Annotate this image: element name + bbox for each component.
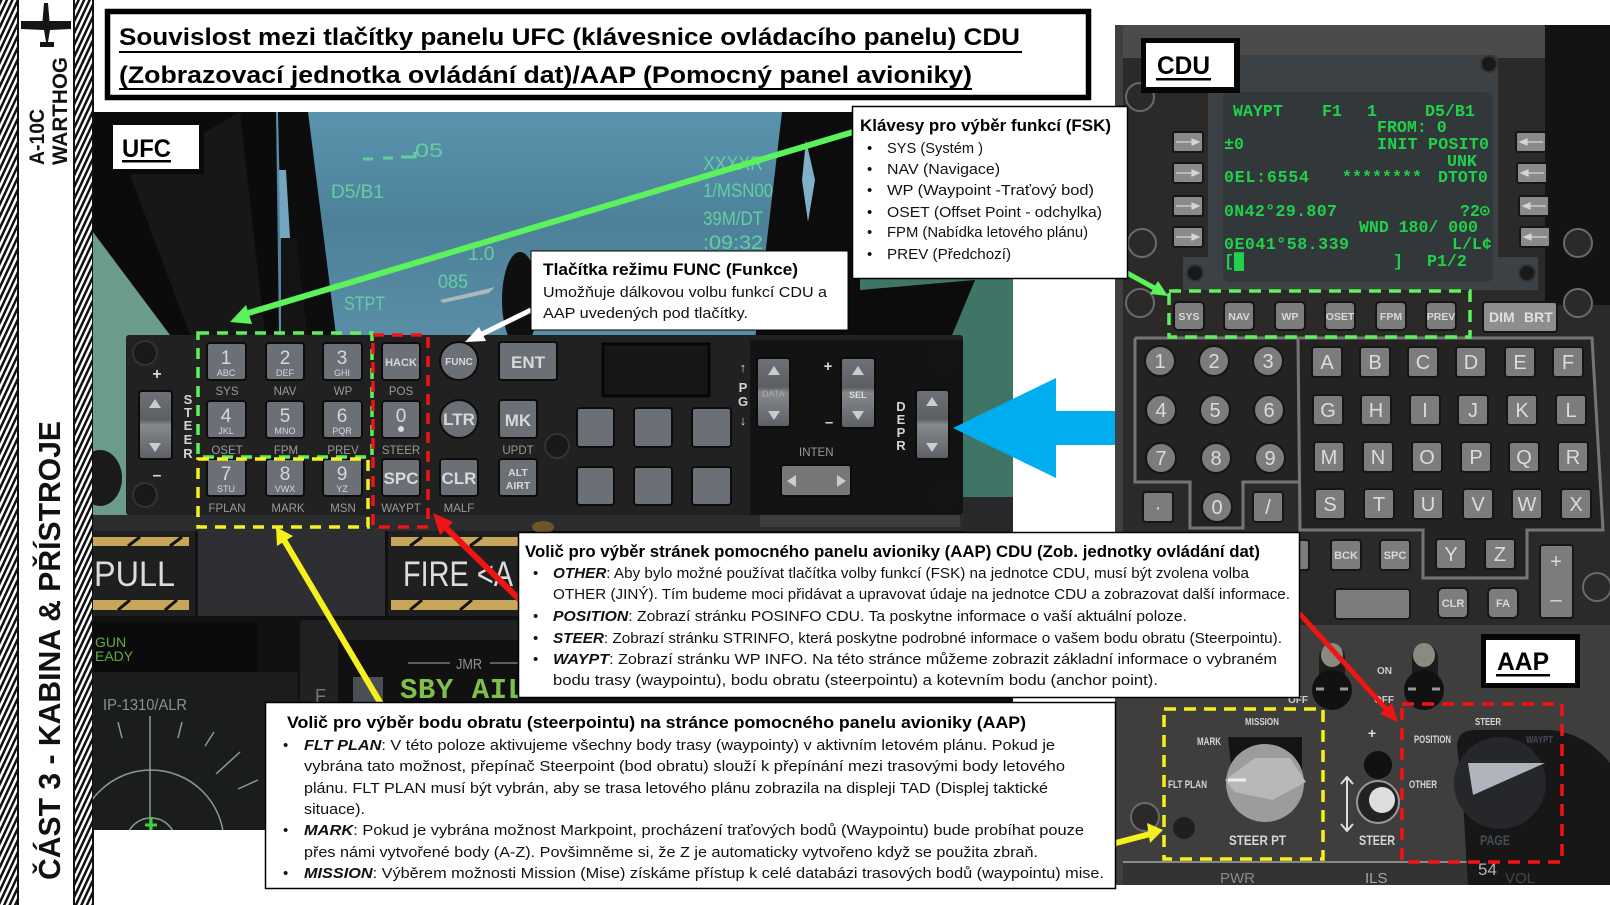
CDU number keys: 7: [1155, 448, 1167, 470]
label: CDU: [1141, 38, 1240, 93]
CDU letter keys: G: [1320, 400, 1336, 422]
CDU letter keys: J: [1468, 400, 1478, 422]
HUD symbology: [331, 141, 773, 315]
PG label and DATA, SEL, DEPR, INTEN rockers: R: [896, 438, 906, 453]
sidebar label: aircraft name: WARTHOG: [49, 57, 72, 165]
AAP bottom labels: PWR: [1220, 870, 1255, 887]
STEER rocker: R: [183, 446, 193, 461]
callout: function select keys FSK: •: [867, 204, 872, 221]
PG label and DATA, SEL, DEPR, INTEN rockers: P: [739, 380, 748, 395]
page keys HACK 0 SPC: WAYPT: [381, 503, 421, 515]
CDU letter keys: O: [1419, 447, 1435, 469]
CDU letter keys: L: [1565, 400, 1577, 422]
CDU screen text: ±0: [1224, 135, 1244, 154]
CDU FSK keys: BRT: [1524, 309, 1553, 325]
callout: function select keys FSK: PREV (Předchozí): [887, 246, 1011, 263]
callout: AAP page selector: POSITION: Zobrazí stránku POSINFO CDU. Ta poskytne informace o vaší aktuální poloze.: [553, 608, 1187, 625]
toggle switches: ON: [1377, 666, 1392, 677]
callout: AAP page selector: OTHER: Aby bylo možné používat tlačítka volby funkcí (FSK) na jednotce CDU, musí být zvolena volba: [553, 565, 1250, 582]
AAP panel plate: [1123, 625, 1610, 862]
callout: steerpoint selector: situace).: [304, 801, 365, 818]
HUD symbology: 1/MSN00: [703, 181, 773, 202]
callout: steerpoint selector: plánu. FLT PLAN musí být vybrán, aby se trasa letového plánu zobrazila na displeji TAD (Displej taktické: [304, 780, 1048, 797]
CDU screen text: P1/2: [1427, 252, 1467, 271]
CDU letter keys: P: [1469, 447, 1483, 469]
CDU screen text: [1224, 102, 1492, 271]
callout: function select keys FSK: •: [867, 140, 872, 157]
CDU screen text: 0E041°58.339: [1224, 235, 1349, 254]
photo: UFC cockpit scene: [93, 112, 1013, 830]
number keys with FSK labels: FPM: [274, 445, 298, 457]
number keys with FSK labels: 1: [221, 348, 231, 369]
number keys with FSK labels: PQR: [332, 426, 352, 436]
CDU letter keys: BCK: [1334, 550, 1358, 562]
JMR panel: F: [315, 686, 326, 706]
callout: steerpoint selector: [266, 702, 1116, 888]
number keys with FSK labels: 6: [337, 406, 347, 427]
UFC green FSK dashed frame: [198, 333, 372, 457]
CDU letter keys: [1289, 347, 1591, 619]
CDU number keys: ·: [1155, 497, 1161, 519]
page number: 54: [1478, 860, 1497, 879]
STEER rocker: E: [184, 418, 193, 433]
STEER rocker: T: [184, 405, 192, 420]
CDU screen text: L/L¢: [1452, 235, 1492, 254]
arrow: white FUNC: [465, 310, 531, 342]
knob: PAGE selector: POSITION: [1414, 734, 1451, 746]
UFC scratchpad display: [603, 344, 709, 396]
sidebar: hatched strips and chapter label: [0, 0, 94, 905]
callout: function select keys FSK: •: [867, 224, 872, 241]
callout: steerpoint selector: •: [283, 822, 288, 839]
PG label and DATA, SEL, DEPR, INTEN rockers: G: [738, 394, 748, 409]
number keys with FSK labels: FPLAN: [208, 503, 246, 515]
label: UFC: UFC: [122, 135, 171, 163]
photo: CDU and AAP panels: [1115, 25, 1610, 887]
callout: function select keys FSK: •: [867, 246, 872, 263]
callout: AAP page selector: •: [533, 630, 538, 647]
callout: steerpoint selector: •: [283, 865, 288, 882]
callout: AAP page selector: STEER: Zobrazí stránku STRINFO, která poskytne podrobné informace o vašem bodu obratu (Steerpointu).: [553, 630, 1282, 647]
JMR panel: [300, 620, 528, 707]
STEER toggle: +: [1368, 725, 1376, 741]
CDU letter keys: Q: [1516, 447, 1532, 469]
callout: function select keys FSK: FPM (Nabídka letového plánu): [887, 224, 1088, 241]
CDU screen text: ]: [1393, 252, 1403, 271]
AAP bottom labels: [1221, 873, 1534, 883]
PG label and DATA, SEL, DEPR, INTEN rockers: –: [825, 414, 833, 431]
number keys with FSK labels: 7: [221, 464, 231, 485]
CDU number keys: 0: [1211, 497, 1223, 519]
CDU screen text: UNK: [1447, 152, 1477, 171]
callout: function select keys FSK: •: [867, 161, 872, 178]
CDU screen text: F1: [1322, 102, 1342, 121]
number keys with FSK labels: MARK: [271, 503, 305, 515]
CDU letter keys: E: [1513, 352, 1527, 374]
CDU letter keys: M: [1321, 447, 1337, 469]
HUD symbology: STPT: [344, 294, 385, 315]
callout: AAP page selector: bodu trasy (waypointu), bodu obratu (steerpointu) a kotevním bodu (anchor point).: [553, 672, 1158, 689]
PG label and DATA, SEL, DEPR, INTEN rockers: SEL: [849, 390, 867, 400]
CDU number keys: 2: [1208, 351, 1220, 373]
CDU FSK keys: [1174, 302, 1557, 332]
FUNC LTR CLR ENT MK ALT keys: MALF: [444, 503, 474, 515]
CDU letter keys: I: [1422, 400, 1428, 422]
CDU letter keys: B: [1368, 352, 1382, 374]
toggle switches: OFF: [1374, 695, 1394, 706]
CDU screen text: [█: [1224, 252, 1244, 271]
callout: function select keys FSK: Klávesy pro výběr funkcí (FSK): [860, 117, 1111, 135]
CDU number keys: 4: [1155, 400, 1167, 422]
number keys with FSK labels: 5: [280, 406, 290, 427]
callout: steerpoint selector: •: [283, 737, 288, 754]
number keys with FSK labels: JKL: [218, 426, 234, 436]
toggle switches: [1288, 643, 1444, 710]
indicator: GUN READY: [96, 638, 133, 661]
number keys with FSK labels: 3: [337, 348, 347, 369]
CDU letter keys: H: [1369, 400, 1383, 422]
callout: steerpoint selector: MARK : Pokud je vybrána možnost Markpoint, procházení traťových bodů (Waypointu) bude probíhat pouze: [304, 822, 1084, 839]
radar warning display IP-1310/ALR: [93, 684, 298, 830]
PG label and DATA, SEL, DEPR, INTEN rockers: D: [896, 399, 906, 414]
sidebar label: chapter title: ČÁST 3 - KABINA & PŘÍSTROJE: [31, 421, 67, 880]
label: UFC: [108, 120, 204, 174]
HUD symbology: 05: [415, 141, 443, 162]
callout: AAP page selector: OTHER (JINÝ). Tím budeme moci přidávat a upravovat údaje na jednotce CDU a zobrazovat další informace.: [553, 586, 1290, 603]
CDU screen text: INIT POSIT0: [1377, 135, 1489, 154]
knob: PAGE selector: [1409, 716, 1553, 848]
number keys with FSK labels: SYS: [215, 386, 239, 398]
callout: steerpoint selector: Volič pro výběr bodu obratu (steerpointu) na stránce pomocného panelu avioniky (AAP): [287, 714, 1026, 732]
CDU screen text: WAYPT: [1233, 102, 1283, 121]
PG label and DATA, SEL, DEPR, INTEN rockers: [738, 358, 949, 496]
callout: AAP page selector: •: [533, 608, 538, 625]
STEER rocker: [139, 366, 193, 484]
CDU number keys: 1: [1154, 351, 1166, 373]
number keys with FSK labels: DEF: [276, 368, 295, 378]
knob: PAGE selector: OTHER: [1409, 779, 1437, 791]
AAP bottom labels: VOL: [1505, 870, 1535, 887]
CDU screen text: DTOT0: [1438, 168, 1488, 187]
callout: FUNC mode buttons: Tlačítka režimu FUNC (Funkce): [543, 261, 798, 279]
knob: PAGE selector: STEER: [1475, 716, 1501, 728]
number keys with FSK labels: [207, 343, 362, 515]
CDU letter keys: D: [1464, 352, 1478, 374]
CDU letter keys: Z: [1494, 544, 1506, 566]
FUNC LTR CLR ENT MK ALT keys: CLR: [442, 469, 476, 488]
CDU FSK keys: DIM: [1489, 309, 1515, 325]
CDU screen text: ?2⊙: [1460, 202, 1490, 221]
HUD symbology: 085: [438, 272, 468, 293]
HUD symbology: 1.0: [468, 244, 494, 265]
knob: PAGE selector: WAYPT: [1526, 734, 1553, 746]
UFC red dashed frame: [373, 335, 428, 527]
CDU FSK keys: FPM: [1380, 311, 1402, 323]
STEER toggle: STEER: [1359, 832, 1395, 848]
FUNC LTR CLR ENT MK ALT keys: ENT: [511, 353, 546, 372]
number keys with FSK labels: ABC: [217, 368, 236, 378]
HUD symbology: :09:32: [703, 233, 763, 254]
CDU letter keys: K: [1515, 400, 1529, 422]
number keys with FSK labels: 2: [280, 348, 290, 369]
number keys with FSK labels: WP: [334, 386, 353, 398]
CDU FSK keys: PREV: [1427, 311, 1455, 323]
JMR panel: SBY AIL: [400, 674, 525, 707]
screws on AAP: [1131, 803, 1195, 839]
arrow: green FSK to UFC: [230, 132, 853, 324]
number keys with FSK labels: YZ: [336, 484, 348, 494]
page keys HACK 0 SPC: STEER: [382, 445, 420, 457]
CDU letter keys: S: [1323, 494, 1337, 516]
CDU FSK keys: SYS: [1178, 311, 1200, 323]
PG label and DATA, SEL, DEPR, INTEN rockers: P: [897, 425, 906, 440]
page keys HACK 0 SPC: 0: [396, 406, 406, 427]
warning placard: PULL: PULL: [94, 555, 175, 594]
CDU FSK keys: WP: [1282, 311, 1298, 323]
callout: function select keys FSK: OSET (Offset Point - odchylka): [887, 204, 1102, 221]
STEER rocker: E: [184, 432, 193, 447]
number keys with FSK labels: 9: [337, 464, 347, 485]
CDU letter keys: SPC: [1384, 550, 1406, 562]
CDU number keys: 6: [1263, 400, 1275, 422]
AAP bottom labels: ILS: [1365, 870, 1388, 887]
page keys HACK 0 SPC: SPC: [384, 469, 418, 488]
PG label and DATA, SEL, DEPR, INTEN rockers: E: [897, 412, 906, 427]
title: (Zobrazovací jednotka ovládání dat)/AAP (Pomocný panel avioniky): [119, 62, 972, 89]
number keys with FSK labels: PREV: [327, 445, 359, 457]
CDU number keys: 5: [1209, 400, 1221, 422]
title: [108, 12, 1088, 98]
knob: STEER PT selector: FLT PLAN: [1168, 779, 1207, 791]
warning placard: FIRE: [388, 531, 528, 616]
CDU screen text: 0N42°29.807: [1224, 202, 1337, 221]
callout: AAP page selector: •: [533, 651, 538, 668]
knob: STEER PT selector: STEER PT: [1229, 832, 1286, 848]
CDU letter keys: F: [1562, 352, 1574, 374]
CDU letter keys: Y: [1444, 544, 1458, 566]
CDU number keys: [1143, 346, 1285, 522]
AAP red dashed frame: [1402, 704, 1562, 862]
arrow: red to AAP page knob: [1299, 613, 1398, 722]
STEER rocker: S: [184, 392, 193, 407]
sidebar label: aircraft name: A-10C: [26, 109, 49, 165]
arrow: green FSK to CDU: [1127, 273, 1168, 296]
icon: A-10 aircraft silhouette: [21, 3, 71, 47]
CDU letter keys: T: [1373, 494, 1385, 516]
screws: [133, 341, 957, 507]
blank keys: [577, 408, 731, 505]
CDU keypad frame: [1135, 338, 1603, 578]
STEER rocker: –: [153, 467, 162, 484]
CDU letter keys: N: [1371, 447, 1385, 469]
CDU screen text: D5/B1: [1425, 102, 1475, 121]
page keys HACK 0 SPC: HACK: [385, 357, 417, 369]
FUNC LTR CLR ENT MK ALT keys: FUNC: [445, 357, 473, 368]
STEER toggle: [1341, 725, 1399, 848]
PG label and DATA, SEL, DEPR, INTEN rockers: +: [824, 358, 833, 375]
PG label and DATA, SEL, DEPR, INTEN rockers: ↑: [740, 360, 746, 375]
brass knob: [532, 521, 554, 533]
HUD symbology: XXXXR: [703, 154, 763, 175]
callout: AAP page selector: WAYPT : Zobrazí stránku WP INFO. Na této stránce můžeme zobrazit základní informace o vybraném: [553, 651, 1277, 668]
CDU FSK keys: NAV: [1228, 311, 1250, 323]
HUD symbology: 39M/DT: [703, 209, 763, 230]
centre cover plate: [198, 528, 385, 616]
FUNC LTR CLR ENT MK ALT keys: [440, 342, 557, 515]
arrow: yellow to UFC steerpoint keys: [276, 527, 381, 704]
callout: FUNC mode buttons: AAP uvedených pod tlačítky.: [543, 305, 748, 322]
label: AAP: AAP: [1497, 648, 1549, 676]
STEER rocker: +: [152, 366, 162, 383]
FUNC LTR CLR ENT MK ALT keys: ALT: [508, 467, 528, 479]
number keys with FSK labels: NAV: [274, 386, 297, 398]
callout: function select keys FSK: WP (Waypoint -Traťový bod): [887, 182, 1094, 199]
CDU screen text: 1: [1367, 102, 1377, 121]
callout: steerpoint selector: přes námi vytvořené body (A-Z). Povšimněme si, že Z je automaticky vytvořeno když se použita zbraň.: [304, 844, 1038, 861]
callout: function select keys FSK: SYS (Systém ): [887, 140, 983, 157]
JMR panel: JMR: [456, 656, 482, 673]
number keys with FSK labels: STU: [217, 484, 235, 494]
CDU letter keys: C: [1416, 352, 1430, 374]
number keys with FSK labels: 4: [221, 406, 232, 427]
CDU letter keys: X: [1569, 494, 1583, 516]
number keys with FSK labels: MNO: [274, 426, 296, 436]
CDU letter keys: R: [1566, 447, 1580, 469]
FUNC LTR CLR ENT MK ALT keys: MK: [505, 411, 532, 430]
radar warning display IP-1310/ALR: IP-1310/ALR: [103, 697, 187, 714]
callout: AAP page selector: •: [533, 565, 538, 582]
CDU green FSK dashed frame: [1169, 291, 1470, 337]
callout: steerpoint selector: FLT PLAN : V této poloze aktivujeme všechny body trasy (waypointy) v aktivním letovém plánu. Pokud je: [304, 737, 1055, 754]
callout: function select keys FSK: [852, 106, 1128, 278]
number keys with FSK labels: 8: [280, 464, 290, 485]
page keys HACK 0 SPC: [381, 343, 421, 515]
knob: STEER PT selector: MARK: [1197, 736, 1221, 748]
sidebar label: aircraft name: [26, 57, 72, 165]
number keys with FSK labels: OSET: [211, 445, 243, 457]
indicator: GUN READY: EADY: [95, 648, 134, 664]
knob: STEER PT selector: MISSION: [1245, 716, 1279, 728]
PG label and DATA, SEL, DEPR, INTEN rockers: ↓: [740, 413, 746, 428]
indicator: GUN READY: GUN: [95, 634, 126, 650]
knob: PAGE selector: PAGE: [1480, 832, 1510, 848]
CDU letter keys: W: [1518, 494, 1537, 516]
CDU letter keys: CLR: [1442, 598, 1464, 610]
PG label and DATA, SEL, DEPR, INTEN rockers: DATA: [762, 389, 785, 399]
number keys with FSK labels: MSN: [330, 503, 356, 515]
CDU number keys: 8: [1210, 448, 1222, 470]
AAP yellow dashed frame: [1164, 709, 1323, 859]
number keys with FSK labels: GHI: [334, 368, 350, 378]
CDU bezel and screen: [1183, 55, 1538, 290]
PG label and DATA, SEL, DEPR, INTEN rockers: INTEN: [799, 447, 834, 459]
CDU letter keys: U: [1421, 494, 1435, 516]
CDU number keys: 3: [1262, 351, 1274, 373]
arrow: red to UFC page keys: [433, 513, 520, 600]
warning placard: PULL: [93, 531, 195, 616]
page keys HACK 0 SPC: POS: [389, 386, 413, 398]
title: Souvislost mezi tlačítky panelu UFC (klávesnice ovládacího panelu) CDU: [119, 24, 1020, 51]
CDU letter keys: +: [1550, 551, 1562, 573]
CDU screws: [1125, 55, 1610, 602]
knob: STEER PT selector: [1168, 716, 1306, 848]
CDU screen text: FROM: 0: [1377, 118, 1447, 137]
warning placard: FIRE: FIRE <A: [403, 555, 514, 594]
callout: AAP page selector: Volič pro výběr stránek pomocného panelu avioniky (AAP) CDU (Zob. jednotky ovládání dat): [525, 543, 1260, 561]
CDU screen text: WND 180/ 000: [1359, 218, 1478, 237]
CDU screen text: ********: [1342, 168, 1422, 187]
FUNC LTR CLR ENT MK ALT keys: UPDT: [502, 445, 534, 457]
callout: FUNC mode buttons: Umožňuje dálkovou volbu funkcí CDU a: [543, 284, 828, 301]
callout: steerpoint selector: vybrána tato možnost, přepínač Steerpoint (bod obratu) slouží k přepínání mezi trasovými body letového: [304, 758, 1065, 775]
callout: function select keys FSK: NAV (Navigace): [887, 161, 1000, 178]
UFC yellow dashed frame: [198, 459, 368, 527]
CDU number keys: /: [1265, 497, 1271, 519]
label: CDU: CDU: [1157, 52, 1210, 80]
CDU screen text: 0EL:6554: [1224, 168, 1309, 187]
CDU letter keys: –: [1550, 589, 1562, 611]
CDU letter keys: A: [1320, 352, 1334, 374]
FUNC LTR CLR ENT MK ALT keys: AIRT: [506, 480, 531, 492]
panel: UFC keypad: [126, 335, 963, 515]
arrow: yellow to AAP steerpoint knob: [1112, 823, 1163, 844]
CDU number keys: 9: [1264, 448, 1276, 470]
CDU line select keys: [1173, 132, 1550, 247]
callout: FUNC mode buttons: [531, 251, 848, 330]
callout: AAP page selector: [518, 532, 1300, 698]
toggle switches: OFF: [1288, 695, 1308, 706]
arrow: blue from CDU to UFC: [953, 378, 1115, 478]
CDU FSK keys: OSET: [1326, 311, 1355, 323]
CDU letter keys: V: [1471, 494, 1485, 516]
HUD symbology: D5/B1: [331, 182, 384, 203]
FUNC LTR CLR ENT MK ALT keys: LTR: [443, 410, 475, 429]
callout: function select keys FSK: •: [867, 182, 872, 199]
CDU letter keys: FA: [1496, 598, 1510, 610]
callout: steerpoint selector: MISSION : Výběrem možnosti Mission (Mise) získáme přístup k celé databázi trasových bodů (waypointu) mise.: [304, 865, 1104, 882]
number keys with FSK labels: VWX: [275, 484, 295, 494]
label: AAP: [1481, 634, 1580, 688]
